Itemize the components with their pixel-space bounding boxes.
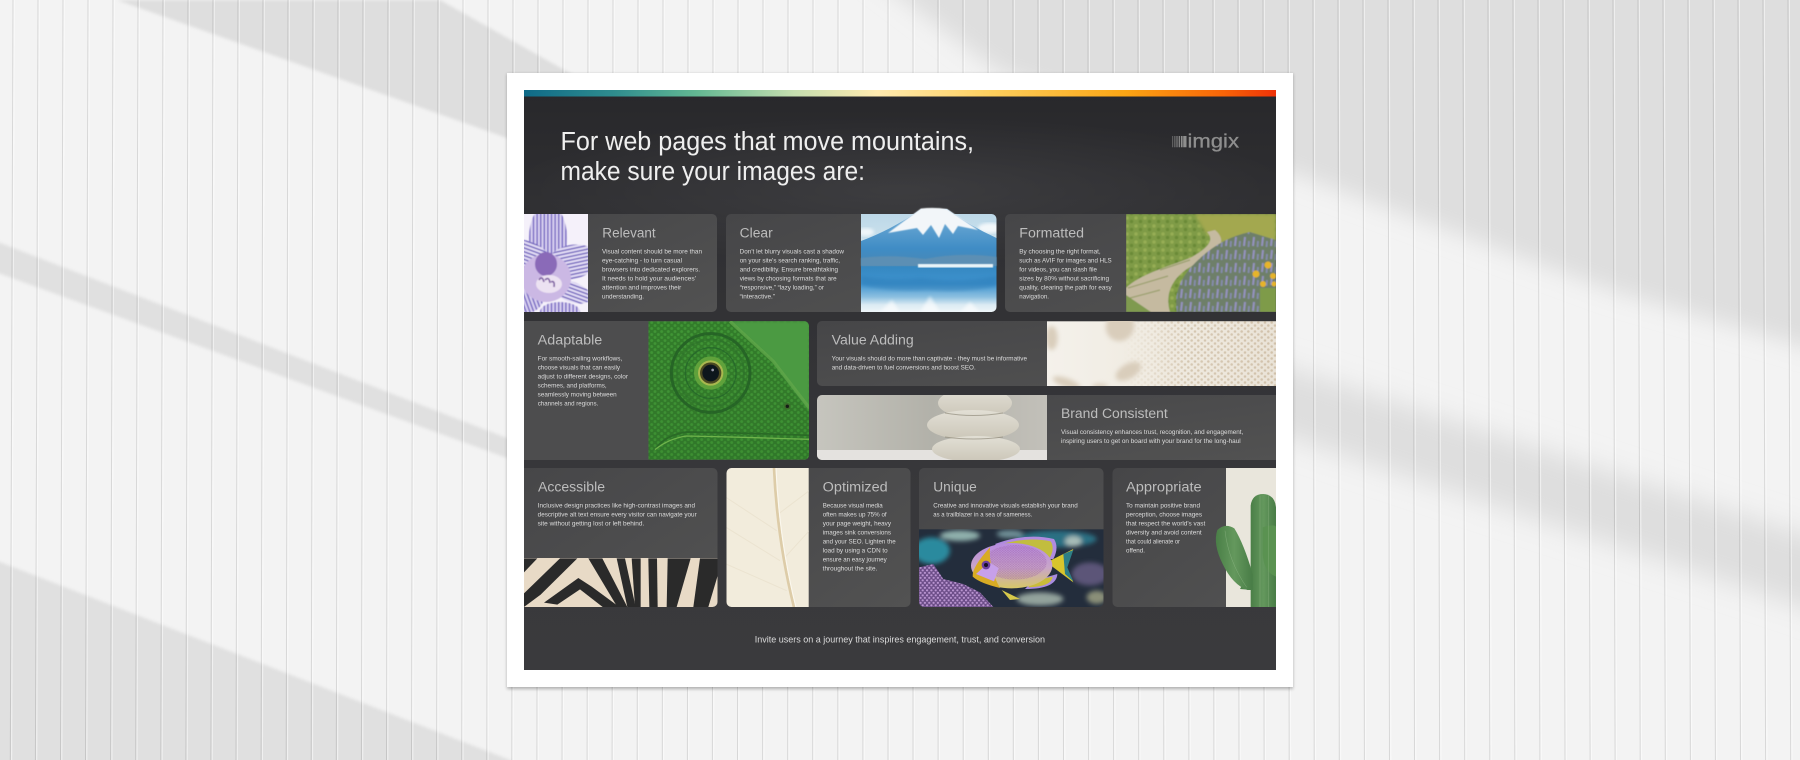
body text: Visual content should be more than [602,249,702,256]
body text: “responsive,” “lazy loading,” or [740,285,824,292]
title: For web pages that move mountains, [560,128,974,156]
white poster mat [507,73,1293,687]
body text: It needs to hold your audiences' [602,276,696,283]
body text: and your SEO. Lighten the [823,538,896,545]
body text: for videos, you can slash file [1019,267,1097,274]
heading: Accessible [538,480,605,495]
body text: channels and regions. [538,400,599,407]
body text: diversity and avoid content [1126,529,1202,536]
rainbow gradient bar [524,90,1276,96]
heading: Clear [740,226,773,241]
image: stacked stones [817,395,1047,460]
image: garden path with lavender [1126,214,1276,312]
body text: that respect the world's vast [1126,520,1206,527]
body text: adjust to different designs, color [538,373,628,380]
body text: and data-driven to fuel conversions and boost SEO. [832,364,976,371]
card: Appropriate [1112,468,1284,607]
body text: inspiring users to get on board with your brand for the long-haul [1061,438,1241,445]
body text [1061,429,1244,445]
dark poster panel [496,90,1300,670]
heading: Appropriate [1126,480,1202,495]
card: Brand Consistent [817,395,1276,460]
body text: ensure an easy journey [823,556,888,563]
body text: throughout the site. [823,565,878,572]
body text: navigation. [1019,294,1049,301]
body text: Your visuals should do more than captivate - they must be informative [832,355,1027,362]
imgix logo [1172,131,1240,152]
heading: Adaptable [538,333,602,348]
body text [823,502,896,572]
body text [538,502,697,527]
body text [740,249,844,301]
body text: schemes, and platforms, [538,382,607,389]
heading: Brand Consistent [1061,406,1168,421]
body text: views by choosing formats that are [740,276,837,283]
image: green cactus overlapping the card [1216,494,1276,607]
heading: Optimized [823,480,888,495]
body text: images sink conversions [823,529,891,536]
image: cream feather [726,468,809,607]
body text: such as AVIF for images and HLS [1019,258,1112,265]
body text: “interactive.” [740,294,775,301]
image: cream backdrop for cactus [1226,468,1276,607]
body text: seamlessly moving between [538,391,617,398]
imgix logo: imgix [1188,131,1240,152]
heading: Relevant [602,226,656,241]
image: zebra stripes [524,558,718,607]
body text: on your site's search ranking, traffic, [740,258,840,265]
image: white porous coral texture [1047,321,1276,386]
body text: choose visuals that can easily [538,364,621,371]
body text: offend. [1126,547,1145,554]
card: Adaptable [515,321,809,460]
footer tagline: Invite users on a journey that inspires engagement, trust, and conversion [755,634,1045,645]
body text: descriptive alt text ensure every visitor can navigate your [538,511,697,518]
poster shadow [507,74,1293,689]
card: Relevant [524,214,717,312]
image: chameleon eye [648,321,809,460]
body text: load by using a CDN to [823,547,888,554]
body text: sizes by 80% without sacrificing [1019,276,1110,283]
title: make sure your images are: [560,158,865,186]
body text [1126,502,1206,554]
body text [934,503,1078,516]
body text: often makes up 75% of [823,511,887,518]
body text [602,249,702,301]
body text [1019,249,1113,301]
body text: and credibility. Ensure breathtaking [740,267,838,274]
body text: Inclusive design practices like high-contrast images and [538,502,695,509]
heading: Value Adding [832,333,914,348]
body text [538,355,628,407]
heading: Formatted [1019,226,1084,241]
body text: your page weight, heavy [823,520,892,527]
body text: Creative and innovative visuals establish your brand [933,502,1078,509]
card: Accessible [515,468,718,607]
body text [832,356,1027,370]
body text: browsers into dedicated explorers. [602,267,700,274]
body text: quality, clearing the path for easy [1019,285,1113,292]
image: tropical fish and coral [913,529,1108,607]
card: Optimized [726,468,910,607]
heading: Unique [933,480,977,495]
body text: perception, choose images [1126,511,1202,518]
body text: For smooth-sailing workflows, [538,355,623,362]
card: Clear [726,214,861,312]
image: purple orchid [524,214,588,312]
card: Unique [913,468,1108,607]
body text: site without getting lost or left behind. [538,520,645,527]
image: mount Fuji card photo clipped to the card [858,214,1002,312]
image: Mount Fuji peak rising above the card [861,208,996,268]
body text: as a trailblazer in a sea of sameness. [933,511,1033,518]
body text: Don't let blurry visuals cast a shadow [740,249,844,256]
body text: attention and improves their [602,285,681,292]
card: Value Adding [817,321,1276,386]
body text: Visual consistency enhances trust, recognition, and engagement, [1061,429,1244,436]
body text: To maintain positive brand [1126,502,1201,509]
body text: Because visual media [823,502,883,509]
body text: eye-catching - to turn casual [602,258,682,265]
body text: understanding. [602,294,644,301]
card: Formatted [1005,214,1285,312]
body text: that could alienate or [1126,538,1180,545]
title [560,128,974,186]
body text: By choosing the right format, [1019,249,1101,256]
